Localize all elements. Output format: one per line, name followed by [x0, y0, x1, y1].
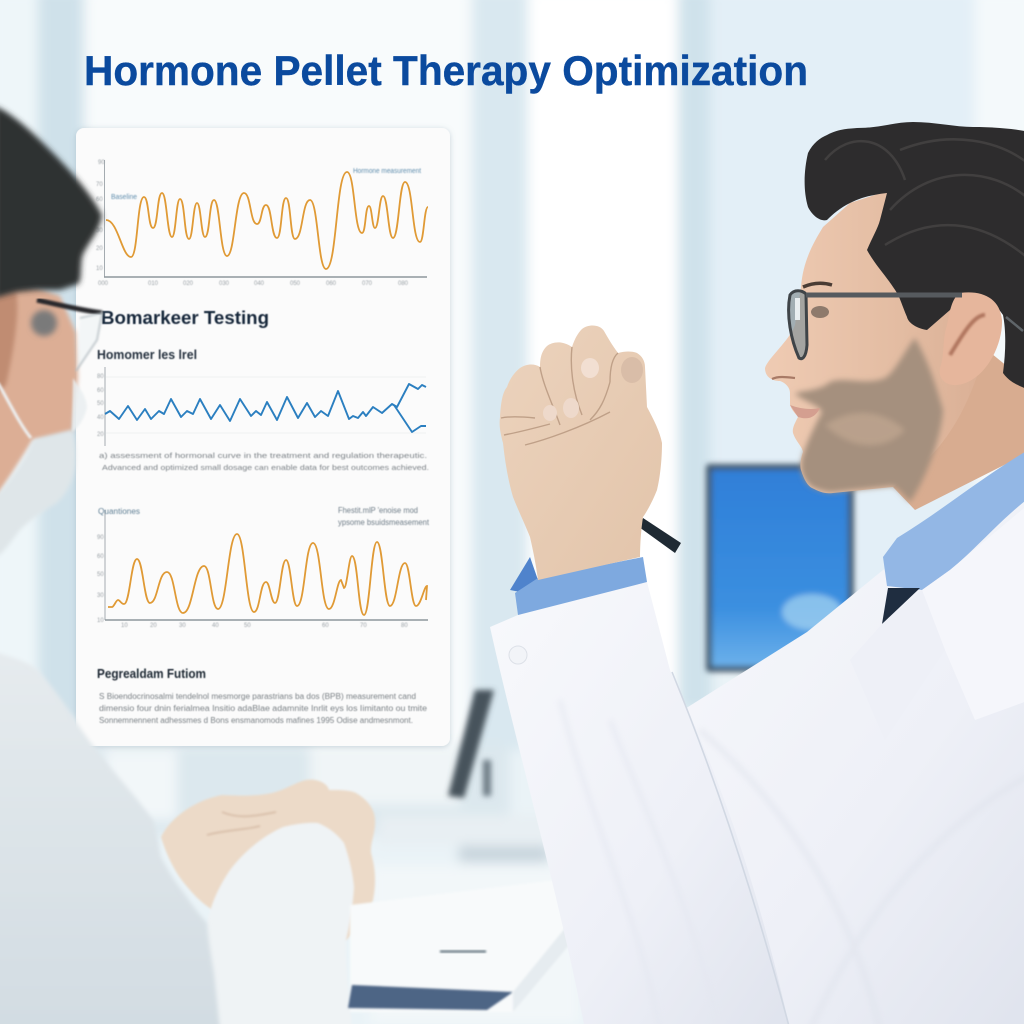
mouth	[790, 405, 820, 418]
text block: footer paragraph: Sonnemnennent adhessmes d Bons ensmanomods mafines 1995 Odise andmesnmont.	[99, 716, 413, 725]
chart: top orange line: 60	[96, 197, 103, 203]
chart: lower orange line: 30	[179, 623, 186, 629]
nose shadow	[772, 377, 795, 379]
background: computer monitor	[706, 464, 854, 672]
chart: top orange line: 060	[326, 281, 337, 287]
chart: top orange line: 020	[183, 281, 194, 287]
surgical mask	[0, 430, 76, 558]
chart: blue line: 40	[97, 415, 104, 421]
hair	[805, 122, 1024, 390]
shirt collar	[883, 449, 1024, 590]
coat body	[0, 652, 220, 1024]
chart: lower orange line: 50	[97, 572, 104, 578]
chart: lower orange line: 80	[401, 623, 408, 629]
chart: top orange line: 10	[96, 266, 103, 272]
chart label: right: Fhestit.mlP 'enoise mod	[338, 506, 418, 515]
chart label: right: ypsome bsuidsmeasement	[338, 518, 430, 527]
chart: lower orange line: 60	[97, 554, 104, 560]
chart: blue line: 80	[97, 374, 104, 380]
chart: lower orange line	[97, 506, 430, 629]
heading: biomarker testing: Bomarkeer Testing	[101, 307, 269, 328]
chart: blue line: 50	[97, 401, 104, 407]
chart: top orange line: 040	[254, 281, 265, 287]
chart: lower orange line: 30	[97, 593, 104, 599]
text block: footer paragraph: dimensio four dnin ferialmea Insitio adaBlae adamnite Inrlit eys los Iimitanto ou tmite	[99, 704, 428, 713]
panel: biomarker report	[76, 128, 450, 746]
chart: top orange line: 90	[98, 160, 105, 166]
necktie	[882, 588, 920, 624]
chart label: left: Baseline	[111, 194, 137, 201]
eyeglasses	[789, 291, 1023, 359]
chart: blue line: 20	[97, 432, 104, 438]
raised fist	[500, 325, 662, 580]
mask nose fold	[72, 378, 87, 432]
hair	[0, 106, 102, 298]
text block: chart description	[99, 451, 429, 472]
chart: lower orange line: 60	[322, 623, 329, 629]
subheading: hormone levels: Homomer les lrel	[97, 348, 197, 362]
chart: lower orange line: 20	[150, 623, 157, 629]
text block: chart description: Advanced and optimized small dosage can enable data for best outcomes achieved.	[102, 463, 429, 472]
text block: footer paragraph	[99, 692, 428, 725]
eye and brow	[803, 283, 832, 318]
chart: lower orange line: 10	[121, 623, 128, 629]
chart: top orange line: 030	[219, 281, 230, 287]
coat sleeve	[490, 582, 790, 1024]
background: desk lamp	[448, 690, 494, 798]
text block: footer paragraph: S Bioendocrinosalmi tendelnol mesmorge parastrians ba dos (BPB) measurement cand	[99, 692, 416, 701]
chart: top orange line: 70	[96, 182, 103, 188]
chart: lower orange line: 90	[97, 535, 104, 541]
chart label: left: Quantiones	[98, 507, 140, 516]
chart: top orange line: 050	[290, 281, 301, 287]
desk with notebook	[348, 880, 575, 1012]
shirt cuff	[510, 557, 538, 592]
chart: lower orange line: 50	[244, 623, 251, 629]
left person: clinician seen from behind	[0, 106, 375, 1024]
text block: chart description: a) assessment of hormonal curve in the treatment and regulation therapeutic.	[99, 451, 427, 460]
chart: blue line: 60	[97, 388, 104, 394]
clasped hands	[161, 780, 375, 940]
chart label: right: Hormone measurement	[353, 168, 421, 175]
ear	[940, 292, 1002, 385]
pen	[639, 518, 681, 553]
chart: top orange line: 000	[98, 281, 109, 287]
right person: doctor in white coat	[490, 122, 1024, 1024]
shirt cuff band	[515, 557, 647, 615]
ear	[0, 292, 17, 395]
chart: lower orange line: 10	[97, 618, 104, 624]
face	[765, 190, 990, 493]
coat lapel	[922, 503, 1024, 720]
coat sleeve	[200, 823, 354, 1024]
neck and ear skin	[0, 285, 78, 500]
neck	[850, 340, 1024, 510]
mask strap	[0, 383, 31, 438]
chart: top orange line: 080	[398, 281, 409, 287]
chart: top orange line: 30	[96, 228, 103, 234]
coat body	[640, 500, 1024, 1024]
heading: pegrealdam fution: Pegrealdam Futiom	[97, 667, 206, 681]
glasses	[31, 300, 102, 371]
chart: top orange line: 20	[96, 246, 103, 252]
chart: top orange line: 070	[362, 281, 373, 287]
chart: top orange line: 010	[148, 281, 159, 287]
chart: lower orange line: 40	[212, 623, 219, 629]
chart: lower orange line: 70	[360, 623, 367, 629]
stubble beard	[795, 338, 943, 502]
title: Hormone Pellet Therapy Optimization	[84, 47, 808, 94]
chart: top orange line	[96, 160, 428, 287]
chart: blue line	[97, 367, 426, 446]
chart label: right	[338, 506, 430, 527]
